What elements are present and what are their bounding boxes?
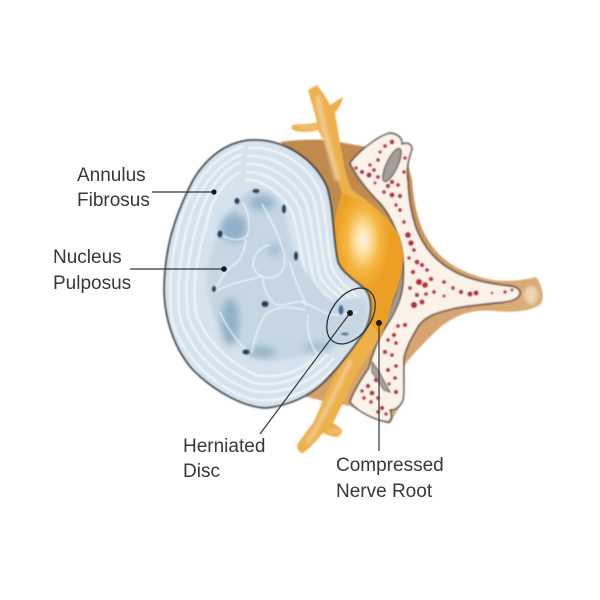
facet joint: lower [372, 362, 390, 392]
herniation circle [317, 279, 385, 353]
label: annulus fibrosus: Annulus [77, 165, 146, 186]
label: compressed nerve root: Compressed [336, 455, 444, 476]
nerve: sac highlight gradient [334, 193, 403, 337]
label: herniated disc: Disc [183, 461, 220, 482]
spinal canal inner sliver [381, 262, 403, 328]
diagram: herniated disc cross-section [54, 84, 544, 497]
nucleus: darker blue shading [221, 196, 334, 357]
nerve: root pale highlights [300, 98, 350, 442]
label: annulus fibrosus: Fibrosus [77, 190, 150, 211]
leader: annulus fibrosus [152, 189, 217, 195]
leader: herniated disc [260, 310, 353, 434]
bone: vertebral arch [350, 133, 520, 422]
label: herniated disc: Herniated [183, 436, 265, 457]
label: compressed nerve root: Nerve Root [336, 481, 433, 502]
label: nucleus pulposus: Nucleus [53, 247, 122, 268]
facet joint: upper [379, 146, 405, 184]
nerve: dural sac and roots [292, 85, 403, 453]
bone marrow speckles [354, 140, 513, 416]
annulus: concentric lamellae [170, 146, 360, 400]
label: nucleus pulposus: Pulposus [53, 273, 131, 294]
disc: annulus fibrosus [164, 140, 371, 408]
nucleus: pale lobe boundaries [214, 203, 358, 355]
disc outline [164, 140, 371, 408]
leader: compressed nerve root [376, 320, 382, 451]
brown ligament tissue [280, 140, 543, 424]
nucleus: dark blue crevices [212, 189, 349, 354]
nucleus pulposus [207, 189, 367, 361]
leader: nucleus pulposus [130, 266, 227, 272]
